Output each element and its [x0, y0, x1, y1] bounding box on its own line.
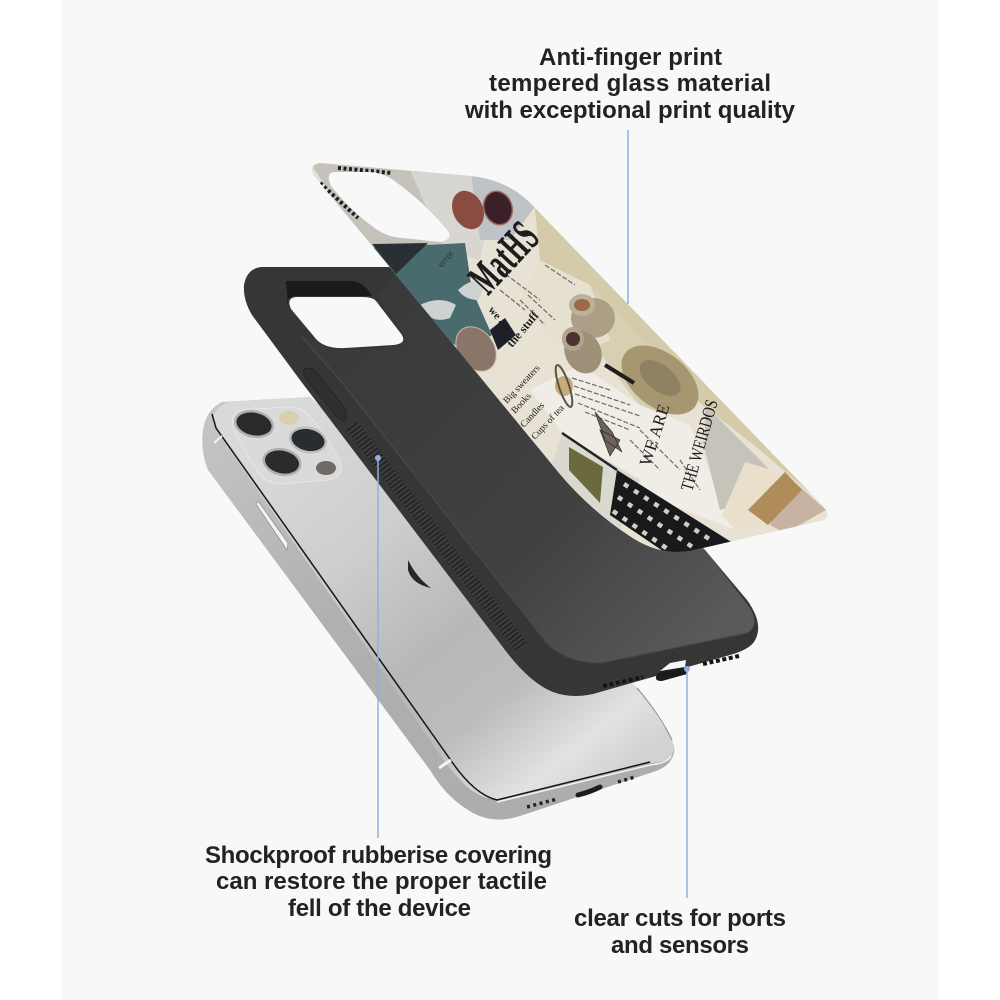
caption: clear cuts: and sensors	[611, 932, 749, 959]
dark photo strip	[372, 243, 428, 274]
infographic canvas	[202, 48, 828, 953]
text error: error	[436, 248, 456, 269]
red coffee circles	[452, 190, 514, 230]
camera lens 3	[261, 446, 303, 478]
caption: glass material: Anti-finger print	[539, 44, 722, 71]
silver phone	[202, 397, 674, 820]
collage paper base	[312, 163, 828, 552]
calculator screen	[569, 447, 603, 503]
caption: shockproof covering: fell of the device	[288, 895, 471, 922]
text big sweaters list: Books	[510, 391, 534, 416]
leader line: ports	[684, 666, 690, 898]
text MATHS: MatHS	[459, 211, 549, 303]
caption: shockproof covering	[205, 842, 552, 922]
text big sweaters list: Big sweaters	[502, 363, 543, 406]
calculator body	[550, 433, 640, 530]
camera lens 1	[233, 408, 275, 440]
calculator keys	[613, 484, 714, 552]
leader line: rubber covering	[375, 455, 381, 838]
right sketch area	[705, 405, 770, 510]
text WE ARE: WE ARE	[636, 402, 674, 468]
books	[748, 472, 826, 533]
text we are made of: we are	[486, 304, 515, 335]
moon	[622, 346, 698, 414]
text big sweaters list: Candles	[519, 401, 547, 430]
bottom speaker and port	[527, 777, 635, 807]
speaker holes right	[703, 656, 739, 664]
text big sweaters list	[502, 366, 564, 439]
grey top-left paper	[312, 163, 469, 254]
text the stuff: the stuff	[504, 308, 542, 350]
sketch paper	[540, 260, 610, 345]
coffee cups	[562, 294, 615, 374]
side buttons	[256, 501, 288, 550]
side button cover	[304, 368, 346, 421]
beige right band	[534, 208, 812, 495]
phone side frame	[202, 397, 674, 820]
calculator top edge	[562, 433, 617, 470]
camera flash	[279, 411, 299, 425]
dark collage block	[490, 318, 516, 350]
teal photo	[370, 243, 492, 350]
lidar sensor	[316, 461, 336, 475]
caption: glass material: with exceptional print quality	[464, 97, 796, 124]
phone screen edge line	[212, 414, 650, 800]
camera bump	[232, 407, 341, 484]
top strip glyph marks	[320, 168, 392, 218]
butterfly	[595, 412, 622, 456]
white note page	[530, 365, 735, 530]
caption: clear cuts: clear cuts for ports	[574, 905, 786, 932]
apple logo sliver	[408, 560, 431, 588]
text big sweaters list: Cups of tea	[529, 402, 567, 442]
handwriting lines	[500, 265, 700, 490]
calculator keypad	[610, 470, 731, 552]
caption: shockproof covering: Shockproof rubberise covering	[205, 842, 552, 869]
case outer body	[244, 267, 758, 696]
frame antenna band	[439, 760, 451, 768]
leader line: glass	[627, 130, 629, 304]
charging port opening	[660, 660, 686, 671]
cream paper under books	[722, 462, 780, 530]
saturn	[554, 364, 574, 408]
caption: glass material: tempered glass material	[489, 70, 771, 97]
caption: clear cuts	[574, 905, 786, 959]
camera lens 2	[288, 425, 328, 455]
rubber grip ridges	[352, 426, 522, 648]
phone back face	[213, 397, 674, 799]
speaker holes left	[603, 677, 643, 686]
text THE WEIRDOS: THE WEIRDOS	[677, 397, 722, 493]
sculpted hands	[420, 281, 485, 320]
rim highlight	[300, 335, 747, 663]
case inner face	[300, 267, 754, 663]
charging port cutout	[656, 666, 687, 681]
camera hole inner band	[286, 281, 372, 305]
caption: shockproof covering: can restore the proper tactile	[216, 868, 547, 895]
black case	[244, 267, 758, 696]
pen	[605, 365, 634, 383]
caption: glass material	[464, 44, 796, 124]
mosaic circle	[455, 326, 497, 372]
tempered glass collage panel	[312, 163, 828, 552]
rubber grip base	[352, 426, 522, 648]
